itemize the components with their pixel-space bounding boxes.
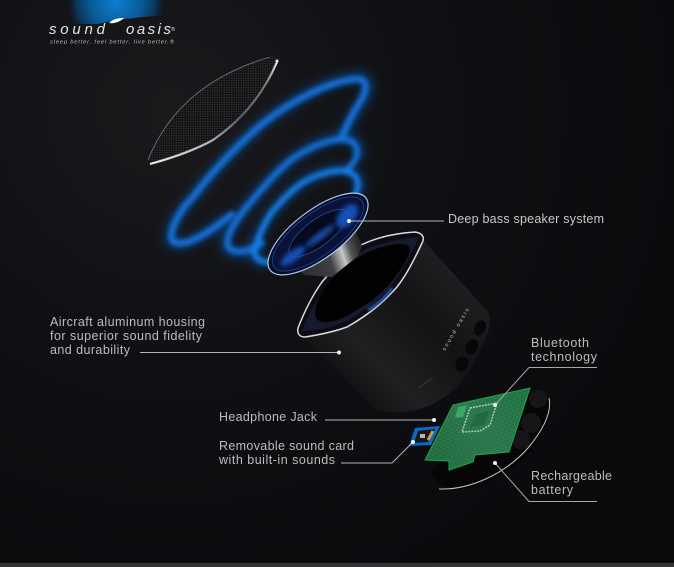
callout: deep bass speaker system: [347, 212, 604, 226]
outer wave ring: [171, 79, 366, 243]
callout: bluetooth technology: Bluetooth: [531, 336, 589, 350]
logo: sound oasis: sound: [49, 21, 106, 38]
callout: rechargeable battery: Rechargeable: [531, 469, 612, 483]
driver magnet: [296, 222, 362, 277]
housing logo text: sound oasis: [442, 307, 471, 352]
callout: removable sound card: Removable sound card: [219, 439, 354, 453]
callout: aircraft aluminum housing: Aircraft aluminum housing: [50, 315, 205, 329]
speaker grille: [148, 56, 278, 164]
callout: bluetooth technology: technology: [531, 350, 598, 364]
circuit board assembly: [425, 388, 550, 489]
callout: headphone jack: [219, 410, 436, 424]
callout: aircraft aluminum housing: for superior sound fidelity: [50, 329, 203, 343]
inner wave ring: [255, 171, 358, 262]
logo: sound oasis: sleep better. feel better. live better.®: [50, 38, 175, 46]
green circuit board: [425, 388, 530, 470]
logo: sound oasis: [49, 0, 175, 46]
callout: headphone jack: Headphone Jack: [219, 410, 318, 424]
middle wave ring: [227, 139, 357, 251]
housing opening rim: [298, 232, 423, 337]
speaker ports: [453, 318, 488, 374]
logo: sound oasis: ®: [171, 26, 175, 33]
housing body: [298, 232, 490, 412]
callout: rechargeable battery: [493, 461, 612, 502]
sound card: [409, 426, 440, 446]
speaker driver: [256, 179, 380, 289]
battery base: [431, 392, 550, 489]
callout: removable sound card: [218, 439, 415, 467]
callout: removable sound card: with built-in sounds: [218, 453, 335, 467]
battery cells: [512, 390, 547, 450]
logo: sound oasis: oasis: [126, 21, 172, 38]
blue sound waves: [170, 76, 368, 263]
callout: rechargeable battery: battery: [531, 483, 574, 497]
callout: deep bass speaker system: Deep bass speaker system: [448, 212, 604, 226]
callout: bluetooth technology: [493, 336, 598, 407]
callout: aircraft aluminum housing: [50, 315, 341, 357]
callout: aircraft aluminum housing: and durability: [50, 343, 131, 357]
